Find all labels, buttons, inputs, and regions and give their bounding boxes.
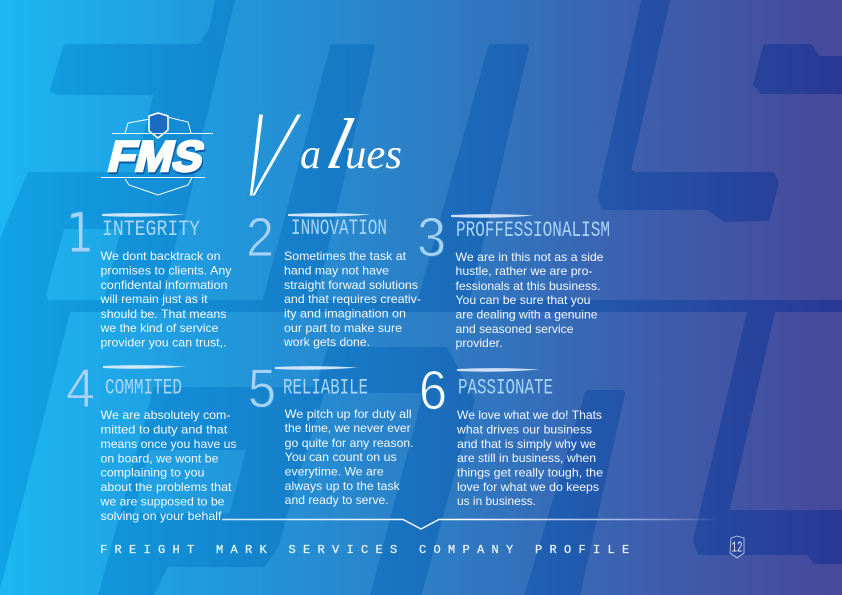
- body text: everytime. We are: [285, 464, 384, 478]
- body text: and that requires creativ-: [284, 292, 421, 306]
- body text: Sometimes the task at: [284, 249, 407, 263]
- body text: You can count on us: [285, 450, 397, 464]
- body text: love for what we do keeps: [457, 480, 599, 494]
- body text: and that is simply why we: [457, 437, 596, 451]
- heading: PROFFESSIONALISM: [456, 217, 610, 243]
- panel: commited: [66, 357, 236, 523]
- title: Values: [219, 86, 402, 225]
- body text: confidental information: [100, 278, 228, 292]
- body text: are still in business, when: [457, 451, 596, 465]
- brush stroke: [288, 213, 371, 217]
- number 5: 5: [248, 357, 276, 419]
- title: Values: a: [300, 132, 321, 178]
- body text: means once you have us: [100, 437, 236, 451]
- brush stroke: [275, 366, 358, 370]
- number 1: 1: [66, 201, 94, 265]
- number 4: 4: [66, 357, 95, 419]
- body text: are dealing with a genuine: [456, 308, 598, 322]
- body text: us in business.: [457, 494, 536, 508]
- brush stroke: [103, 365, 186, 369]
- body text: our part to make sure: [284, 321, 402, 335]
- body text: You can be sure that you: [456, 293, 590, 307]
- body text: what drives our business: [456, 422, 592, 436]
- icon: small top shield: [149, 113, 168, 138]
- body text: things get really tough, the: [457, 466, 603, 480]
- body text: we are supposed to be: [99, 494, 225, 508]
- body text: provider you can trust,.: [100, 336, 226, 350]
- title: Values: ues: [345, 132, 402, 178]
- panel: innovation: [246, 206, 421, 349]
- top rule: [112, 133, 213, 134]
- body text: ity and imagination on: [284, 306, 406, 320]
- body text: [99, 249, 232, 350]
- panel: integrity: [66, 201, 232, 350]
- body text: We pitch up for duty all: [285, 407, 412, 421]
- heading: RELIABILE: [283, 374, 368, 400]
- panel: reliabile: [248, 357, 414, 507]
- page number: 12: [732, 540, 742, 556]
- title: Values: l: [320, 104, 360, 184]
- body text: We love what we do! Thats: [457, 408, 602, 422]
- panel: passionate: [419, 359, 603, 508]
- body text: We are absolutely com-: [100, 408, 230, 422]
- icon: shield upper wings: [125, 117, 191, 133]
- body text: will remain just as it: [99, 292, 208, 306]
- body text: go quite for any reason.: [285, 436, 414, 450]
- logo letters: FMS: [104, 133, 210, 181]
- body text: [99, 408, 237, 523]
- page number badge: [730, 536, 744, 558]
- number 2: 2: [246, 206, 274, 268]
- panel: proffessionalism: [417, 206, 610, 350]
- number 6: 6: [419, 359, 447, 421]
- body text: straight forwad solutions: [284, 278, 418, 292]
- body text: solving on your behalf: [100, 509, 222, 523]
- heading: PASSIONATE: [458, 374, 553, 400]
- body text: and seasoned service: [456, 322, 574, 336]
- body text: [456, 408, 603, 508]
- body text: about the problems that: [100, 480, 232, 494]
- logo letters shadow: FMS: [105, 135, 211, 183]
- bottom rule: [101, 177, 205, 178]
- icon: page shield: [730, 536, 744, 558]
- body text: provider.: [456, 336, 502, 350]
- body text: on board, we wont be: [100, 452, 219, 466]
- heading: INNOVATION: [291, 215, 387, 241]
- body text: hand may not have: [284, 264, 389, 278]
- body text: and ready to serve.: [285, 493, 389, 507]
- body text: we the kind of service: [99, 321, 219, 335]
- body text: work gets done.: [283, 335, 370, 349]
- body text: fessionals at this business.: [456, 279, 600, 293]
- icon: shield lower outline: [125, 178, 192, 195]
- body text: always up to the task: [285, 479, 401, 493]
- heading: INTEGRITY: [102, 216, 200, 242]
- body text: [456, 250, 604, 350]
- title: Values: V: [219, 86, 314, 225]
- footer text: FREIGHT MARK SERVICES COMPANY PROFILE: [100, 543, 637, 557]
- body text: We are in this not as a side: [456, 250, 604, 264]
- brush stroke: [457, 368, 540, 372]
- body text: [283, 249, 421, 349]
- body text: mitted to duty and that: [100, 422, 228, 436]
- footer divider with chevron: [222, 520, 720, 529]
- heading: COMMITED: [105, 374, 182, 400]
- body text: should be. That means: [100, 307, 226, 321]
- body text: [285, 407, 414, 507]
- number 3: 3: [417, 206, 446, 268]
- body text: complaining to you: [100, 466, 204, 480]
- brush stroke: [102, 213, 185, 217]
- body text: promises to clients. Any: [100, 264, 232, 278]
- brush stroke: [451, 214, 534, 218]
- logo: FMS shield: [101, 113, 213, 195]
- body text: hustle, rather we are pro-: [456, 264, 593, 278]
- body text: the time, we never ever: [285, 421, 411, 435]
- body text: We dont backtrack on: [100, 249, 220, 263]
